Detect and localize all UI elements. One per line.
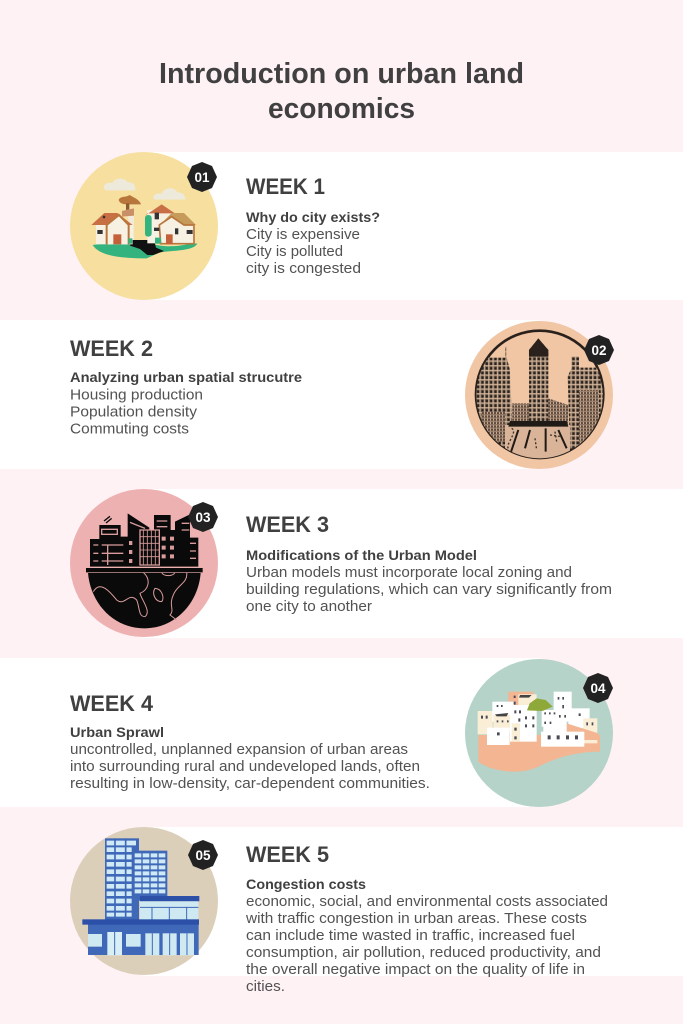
text: week 1: Why do city exists? xyxy=(246,209,380,225)
text: week 5: consumption, air pollution, reduced productivity, and xyxy=(246,945,601,961)
badge 03: 03 xyxy=(195,510,211,525)
text: week 4: uncontrolled, unplanned expansion of urban areas xyxy=(70,742,408,758)
text: week 4: into surrounding rural and undeveloped lands, often xyxy=(70,759,420,775)
text: week 5: cities. xyxy=(246,979,285,995)
text: week 5: economic, social, and environmental costs associated xyxy=(246,894,608,910)
text: week 4 xyxy=(70,724,430,792)
badge 05: 05 xyxy=(195,848,211,863)
text: week 5: the overall negative impact on the quality of life in xyxy=(246,962,585,978)
text: week 5: Congestion costs xyxy=(246,876,366,892)
text: week 5: can include time wasted in traffic, increased fuel xyxy=(246,928,575,944)
title xyxy=(159,58,524,125)
icon: village houses xyxy=(70,152,218,300)
text: week 1: City is polluted xyxy=(246,244,343,260)
text: week 1: City is expensive xyxy=(246,227,360,243)
panel: week 4 xyxy=(0,658,613,807)
text: week 1: city is congested xyxy=(246,261,361,277)
text: week 4: Urban Sprawl xyxy=(70,724,164,740)
panel: week 1 xyxy=(70,152,683,300)
text: week 2: Commuting costs xyxy=(70,422,189,438)
text: week 2: Housing production xyxy=(70,388,203,404)
badge 02: 02 xyxy=(591,343,607,358)
icon: engraved city xyxy=(465,321,613,469)
panel: week 2 xyxy=(0,320,614,469)
icon: hillside town xyxy=(465,659,613,807)
heading: week 4: WEEK 4 xyxy=(70,691,154,716)
text: week 2: Population density xyxy=(70,404,198,420)
text: week 4: resulting in low-density, car-dependent communities. xyxy=(70,776,430,792)
text: week 3: one city to another xyxy=(246,599,372,615)
heading: week 2: WEEK 2 xyxy=(70,336,153,361)
badge 02 xyxy=(584,335,614,365)
title: Introduction on urban land xyxy=(159,58,524,90)
text: week 5: with traffic congestion in urban areas. These costs xyxy=(245,911,587,927)
text: week 3: Modifications of the Urban Model xyxy=(246,547,477,563)
text: week 3: building regulations, which can vary significantly from xyxy=(246,582,612,598)
heading: week 1: WEEK 1 xyxy=(246,174,325,199)
title: economics xyxy=(268,93,415,125)
text: week 2: Analyzing urban spatial strucutre xyxy=(70,369,302,385)
panel: week 5 xyxy=(70,827,683,995)
badge 01: 01 xyxy=(194,170,210,185)
heading: week 3: WEEK 3 xyxy=(246,512,329,537)
text: week 1 xyxy=(246,209,380,277)
badge 03 xyxy=(188,502,218,532)
badge 04: 04 xyxy=(590,681,606,696)
heading: week 5: WEEK 5 xyxy=(246,842,329,867)
icon: city on globe xyxy=(70,489,218,637)
panel: week 3 xyxy=(70,489,683,638)
badge 01 xyxy=(187,162,217,192)
badge 05 xyxy=(188,840,218,870)
icon: office building xyxy=(70,827,218,975)
text: week 5 xyxy=(245,876,608,995)
text: week 3 xyxy=(246,547,612,615)
text: week 3: Urban models must incorporate local zoning and xyxy=(246,565,572,581)
badge 04 xyxy=(583,673,613,703)
text: week 2 xyxy=(70,369,302,438)
